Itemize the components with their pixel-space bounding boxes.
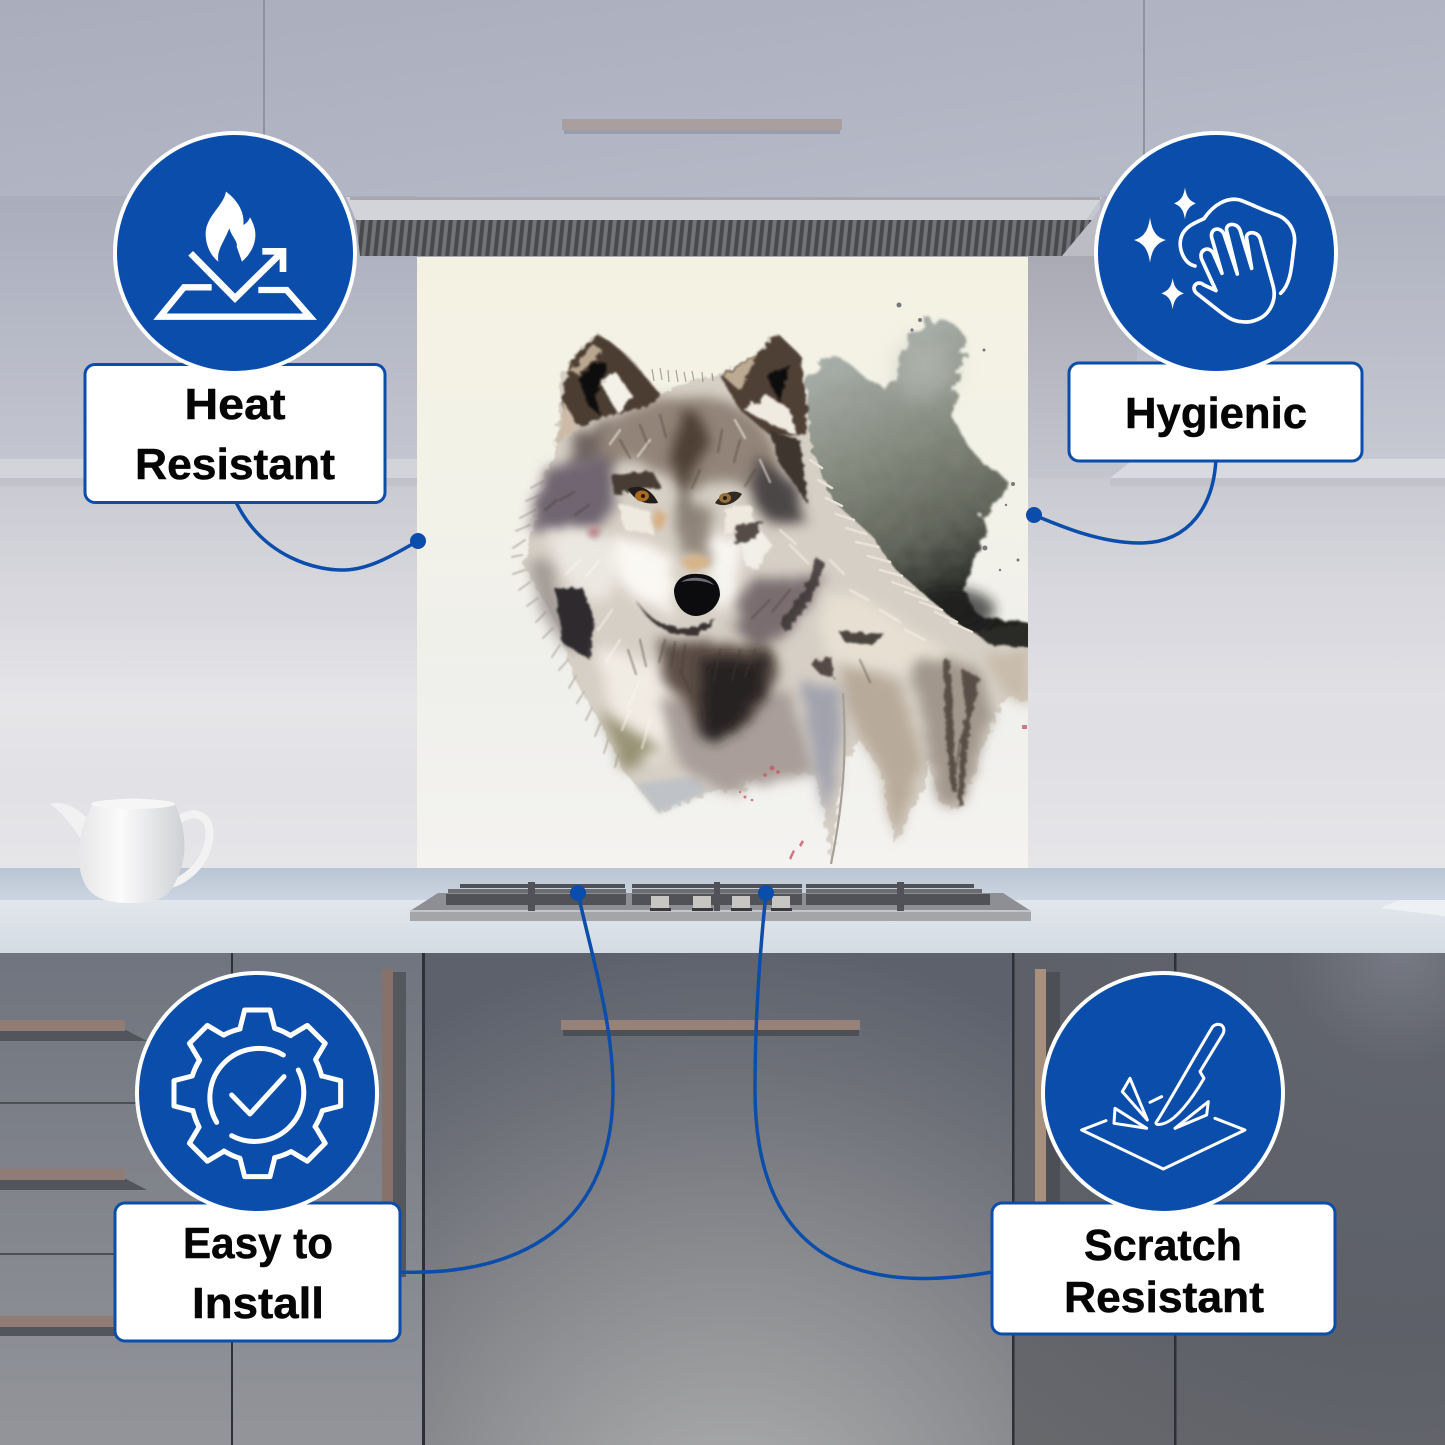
tiled wall (0, 250, 1445, 870)
label text: Resistant (135, 440, 335, 489)
pink cheek fleck (588, 526, 600, 538)
label box (85, 364, 385, 502)
callout: hygienic (1069, 133, 1362, 461)
label text: Install (192, 1279, 324, 1328)
connector: easy to install (400, 885, 613, 1272)
chest dark (655, 640, 778, 735)
edge fur spikes back (810, 460, 972, 632)
left eye (628, 487, 658, 503)
collar dark line (780, 558, 824, 632)
brow patch left (611, 471, 662, 496)
cheek pale (548, 529, 620, 600)
icon: hand wiping with sparkles (1134, 187, 1295, 322)
panel: wolf watercolour splashback (417, 257, 1030, 868)
wolf body and head (512, 333, 1030, 864)
label text: Heat (184, 380, 286, 429)
chest pale fur (595, 645, 676, 765)
grey patch above right eye (750, 456, 804, 525)
label text (135, 380, 335, 489)
label text: Resistant (1064, 1273, 1264, 1322)
pale fur under eyes (618, 503, 755, 535)
badge circle (137, 973, 377, 1213)
upper cabinets (0, 0, 1445, 460)
tan markings (652, 508, 668, 532)
cabinet handles (0, 969, 1060, 1336)
chest darkest (700, 656, 768, 740)
fur base silhouette (524, 333, 1030, 864)
right face ruff shadow (740, 530, 772, 570)
neck purple shadow (732, 575, 825, 652)
right drips wash (912, 656, 993, 809)
connector: hygienic (1026, 458, 1216, 543)
ink splash behind wolf (805, 302, 1030, 648)
forehead dark stripe (672, 409, 709, 533)
snout bridge (672, 503, 712, 558)
shoulder dark mark (838, 631, 885, 645)
left cheek grey fringe (528, 560, 590, 650)
lower body brown wash (838, 664, 922, 842)
label box (1069, 363, 1362, 461)
label text (183, 1219, 333, 1328)
badge circle (1096, 133, 1336, 373)
label text: Easy to (183, 1219, 333, 1268)
forehead wash (600, 396, 779, 500)
right eye (715, 492, 742, 505)
right ear (720, 333, 807, 435)
label box (115, 1203, 400, 1341)
callout: scratch resistant (992, 973, 1335, 1334)
counter (0, 868, 1445, 953)
label box (992, 1203, 1335, 1334)
left neck dark patch (555, 588, 594, 660)
badge circle (1043, 973, 1283, 1213)
callout: easy to install (115, 973, 400, 1341)
dark drip lines (943, 660, 980, 806)
nose (674, 574, 720, 616)
lower cabinets (0, 953, 1445, 1445)
muzzle white left (611, 539, 676, 613)
label text: Scratch (1084, 1221, 1242, 1270)
bottom grey wash (635, 776, 709, 813)
red paint flecks (739, 725, 1027, 860)
range hood (346, 197, 1102, 256)
icon: flame on plate with reflecting arrow (160, 192, 310, 317)
upper cabinet handle (562, 119, 842, 134)
connector: heat resistant (235, 500, 426, 570)
cooktop (410, 882, 1031, 921)
burner grates (446, 882, 990, 911)
mouth and chin (637, 601, 716, 635)
thin drip line (831, 693, 845, 864)
left ear (557, 335, 662, 445)
lower left olive fur (601, 711, 659, 773)
icon: knife scratching surface (1082, 1024, 1245, 1169)
purple grey left head (530, 450, 618, 532)
fur strokes light (566, 420, 925, 748)
badge circle (115, 133, 355, 373)
callout: heat resistant (85, 133, 385, 502)
edge fur spikes left (512, 480, 618, 767)
teapot (50, 798, 210, 903)
label text: Hygienic (1125, 389, 1307, 438)
icon: gear with check mark (174, 1010, 341, 1177)
tail wash (983, 649, 1030, 703)
head top tuft (652, 368, 713, 382)
fur strokes dark (545, 415, 960, 770)
shelf lips (0, 459, 1445, 486)
muzzle white right (709, 533, 743, 613)
blue grey drip (800, 682, 841, 820)
shoulder fur (821, 593, 958, 673)
control knobs (650, 896, 792, 911)
lower neck wash (660, 690, 815, 792)
tail dark tip (975, 622, 1030, 648)
label text (1064, 1221, 1264, 1322)
connector: scratch resistant (755, 885, 992, 1279)
upper arm dark mark (811, 656, 834, 678)
temple shadow (568, 420, 622, 472)
right ear base dark stripe (770, 430, 808, 505)
